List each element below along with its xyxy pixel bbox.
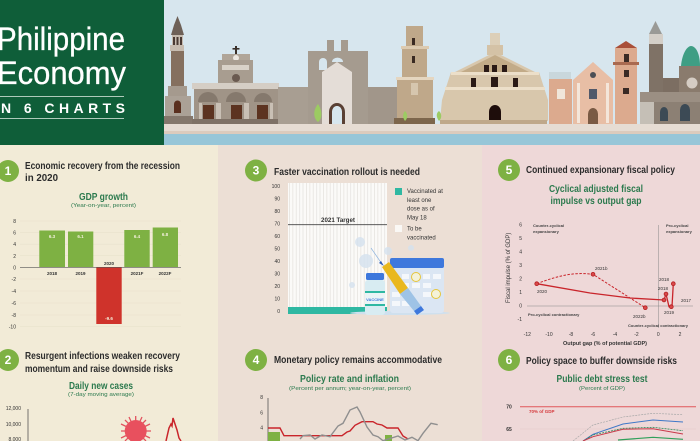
scatter chart: fiscal impulse: Counter-cyclical xyxy=(533,223,564,228)
heading 3: Faster vaccination rollout is needed xyxy=(274,166,420,178)
line chart: debt stress test: 65 xyxy=(506,427,512,433)
bar chart: GDP growth: -10 xyxy=(9,324,16,330)
panel 3: vaccination xyxy=(245,160,450,315)
chart subtitle: (Percent of GDP) xyxy=(579,386,625,392)
bar chart: GDP growth: -8 xyxy=(12,313,16,319)
bar chart: GDP growth: 6 xyxy=(13,230,16,236)
scatter chart: fiscal impulse: 3 xyxy=(519,263,522,269)
heading 1: in 2020 xyxy=(25,172,58,184)
icon: bell tower one xyxy=(164,16,193,124)
vaccination chart: 30 xyxy=(274,272,280,278)
line chart: policy rate and inflation: 6 xyxy=(260,410,263,416)
axis label: Output gap (% of potential GDP) xyxy=(563,341,647,347)
scatter chart: fiscal impulse: Pro-cyclical xyxy=(666,223,688,228)
scatter chart: fiscal impulse: -8 xyxy=(569,332,573,338)
scatter chart: fiscal impulse: expansionary xyxy=(533,229,560,234)
scatter chart: fiscal impulse: expansionary xyxy=(666,229,693,234)
bar chart: GDP growth: 6.3 xyxy=(49,234,56,239)
scatter chart: fiscal impulse: 4 xyxy=(519,250,522,256)
number badge 4 xyxy=(245,349,267,371)
legend: To be xyxy=(407,226,422,232)
legend: least one xyxy=(407,198,432,204)
chart title: impulse vs output gap xyxy=(550,195,642,207)
scatter chart: fiscal impulse: 1 xyxy=(519,290,522,296)
panel backgrounds xyxy=(0,145,700,441)
bar chart: GDP growth xyxy=(9,219,181,330)
chart subtitle: (7-day moving average) xyxy=(68,392,134,398)
line chart: debt stress test: 70 xyxy=(506,404,512,410)
heading 1: Economic recovery from the recession xyxy=(25,160,180,172)
title: Philippine xyxy=(0,21,125,57)
vaccination chart: 100 xyxy=(272,184,280,190)
scatter chart: fiscal impulse: 2018 xyxy=(658,286,669,291)
line chart: policy rate and inflation: 4 xyxy=(260,426,263,432)
header skyline banner xyxy=(164,0,700,145)
title: Economy xyxy=(0,55,126,91)
vaccination chart: 60 xyxy=(274,234,280,240)
vaccination chart: 0 xyxy=(277,309,280,315)
panel 5: fiscal policy xyxy=(498,159,693,347)
scatter chart: fiscal impulse: 2022b xyxy=(633,314,646,319)
legend: May 18 xyxy=(407,216,427,222)
legend: vaccinated xyxy=(407,236,436,242)
number badge 5: 5 xyxy=(506,163,513,177)
number badge 4: 4 xyxy=(253,353,260,367)
bar chart: GDP growth: 2 xyxy=(13,254,16,260)
heading 2: Resurgent infections weaken recovery xyxy=(25,350,180,362)
legend xyxy=(395,188,443,242)
bar chart: GDP growth: 6.4 xyxy=(134,234,141,239)
scatter chart: fiscal impulse: -6 xyxy=(591,332,595,338)
vaccination chart: 80 xyxy=(274,209,280,215)
bar chart: GDP growth: 6.1 xyxy=(77,234,84,239)
scatter chart: fiscal impulse: 2 xyxy=(519,276,522,282)
vaccination chart: 40 xyxy=(274,259,280,265)
chart title: Cyclical adjusted fiscal xyxy=(549,183,643,195)
scatter chart: fiscal impulse: 2019 xyxy=(664,310,675,315)
scatter chart: fiscal impulse: 2017 xyxy=(681,298,692,303)
scatter chart: fiscal impulse: Counter-cyclical contractionary xyxy=(628,323,689,328)
subtitle xyxy=(0,96,125,119)
icon: baroque church xyxy=(437,33,548,124)
vaccination chart: 70 xyxy=(274,222,280,228)
icon: cathedral one xyxy=(192,46,280,124)
scatter chart: fiscal impulse: -2 xyxy=(634,332,639,338)
icon: stone tower xyxy=(353,26,435,124)
scatter chart: fiscal impulse: 2020 xyxy=(537,289,548,294)
icon: vaccine illustration xyxy=(349,237,450,315)
line chart: daily cases: 10,000 xyxy=(6,422,21,428)
vaccination chart: 50 xyxy=(274,246,280,252)
number badge 3: 3 xyxy=(253,164,260,178)
scatter chart: fiscal impulse: 0 xyxy=(657,332,660,338)
heading 2: momentum and raise downside risks xyxy=(25,363,173,375)
scatter chart: fiscal impulse: -4 xyxy=(613,332,617,338)
heading 2 xyxy=(25,350,180,375)
scatter chart: fiscal impulse: 0 xyxy=(519,304,522,310)
scatter chart: fiscal impulse xyxy=(506,222,693,338)
line chart: debt stress test: 70% of GDP xyxy=(529,409,555,414)
vaccination chart: 2021 Target xyxy=(321,217,355,224)
line chart: daily cases xyxy=(6,406,181,441)
number badge 1 xyxy=(0,160,19,182)
panel 4: policy rate and inflation xyxy=(245,349,442,441)
scatter chart: fiscal impulse: Pro-cyclical contractionary xyxy=(528,312,580,317)
bar chart: GDP growth: 8 xyxy=(13,219,16,225)
number badge 3 xyxy=(245,160,267,182)
number badge 6: 6 xyxy=(506,353,513,367)
scatter chart: fiscal impulse: 5 xyxy=(519,236,522,242)
number badge 2 xyxy=(0,349,19,371)
icon: grey tower cathedral xyxy=(640,21,700,124)
legend: Vaccinated at xyxy=(407,189,443,195)
chart subtitle: (Percent per annum; year-on-year, percent) xyxy=(289,386,411,392)
scatter chart: fiscal impulse: -12 xyxy=(524,332,531,338)
chart title xyxy=(549,183,643,207)
chart title: Public debt stress test xyxy=(556,373,648,385)
bar chart: GDP growth: 2019 xyxy=(75,271,86,276)
header title block xyxy=(0,0,164,145)
scatter chart: fiscal impulse: 2018 xyxy=(659,277,670,282)
bar chart: GDP growth: -6 xyxy=(12,301,16,307)
legend: dose as of xyxy=(407,206,435,212)
scatter chart: fiscal impulse: 2021b xyxy=(595,266,608,271)
chart title: GDP growth xyxy=(79,191,128,203)
heading 1 xyxy=(25,160,180,184)
line chart: daily cases: 12,000 xyxy=(6,406,21,412)
subtitle: N 6 CHARTS xyxy=(1,100,125,116)
icon: virus xyxy=(121,416,151,441)
bar chart: GDP growth: 6.8 xyxy=(162,232,169,237)
bar chart: GDP growth: 2020 xyxy=(104,261,115,266)
icon: pink church xyxy=(549,41,639,124)
number badge 5 xyxy=(498,159,520,181)
number badge 1: 1 xyxy=(5,164,12,178)
bar chart: GDP growth: -9.6 xyxy=(105,316,113,321)
line chart: policy rate and inflation xyxy=(260,395,438,441)
bar chart: GDP growth: 2021F xyxy=(131,271,144,276)
bar chart: GDP growth: -4 xyxy=(12,289,16,295)
chart subtitle: (Year-on-year, percent) xyxy=(71,203,136,209)
panel 1: GDP growth xyxy=(0,160,181,330)
number badge 6 xyxy=(498,349,520,371)
bar chart: GDP growth: 2022F xyxy=(159,271,172,276)
scatter chart: fiscal impulse: 2 xyxy=(679,332,682,338)
number badge 2: 2 xyxy=(5,353,12,367)
vaccination chart: 90 xyxy=(274,196,280,202)
scatter chart: fiscal impulse: -10 xyxy=(545,332,553,338)
scatter chart: fiscal impulse: -1 xyxy=(518,317,522,323)
panel 2: daily new cases xyxy=(0,349,181,441)
vaccination chart xyxy=(272,183,387,315)
title xyxy=(0,21,126,91)
heading 4: Monetary policy remains accommodative xyxy=(274,354,442,366)
icon: vaccine illustration: VACCINE xyxy=(366,297,384,302)
bar chart: GDP growth: 4 xyxy=(13,242,16,248)
panel 6: public debt xyxy=(498,349,696,441)
vaccination chart: 20 xyxy=(274,284,280,290)
bar chart: GDP growth: -2 xyxy=(12,277,16,283)
vaccination chart: 10 xyxy=(274,296,280,302)
line chart: debt stress test xyxy=(506,404,696,441)
icon: fort gate xyxy=(278,40,368,124)
chart title: Daily new cases xyxy=(69,380,133,392)
bar chart: GDP growth: 2018 xyxy=(47,271,58,276)
scatter chart: fiscal impulse: 6 xyxy=(519,222,522,228)
scatter chart: fiscal impulse: Fiscal impulse (% of GDP) xyxy=(506,233,512,303)
chart title: Policy rate and inflation xyxy=(300,373,399,385)
bar chart: GDP growth: 0 xyxy=(13,266,16,272)
line chart: policy rate and inflation: 8 xyxy=(260,395,263,401)
